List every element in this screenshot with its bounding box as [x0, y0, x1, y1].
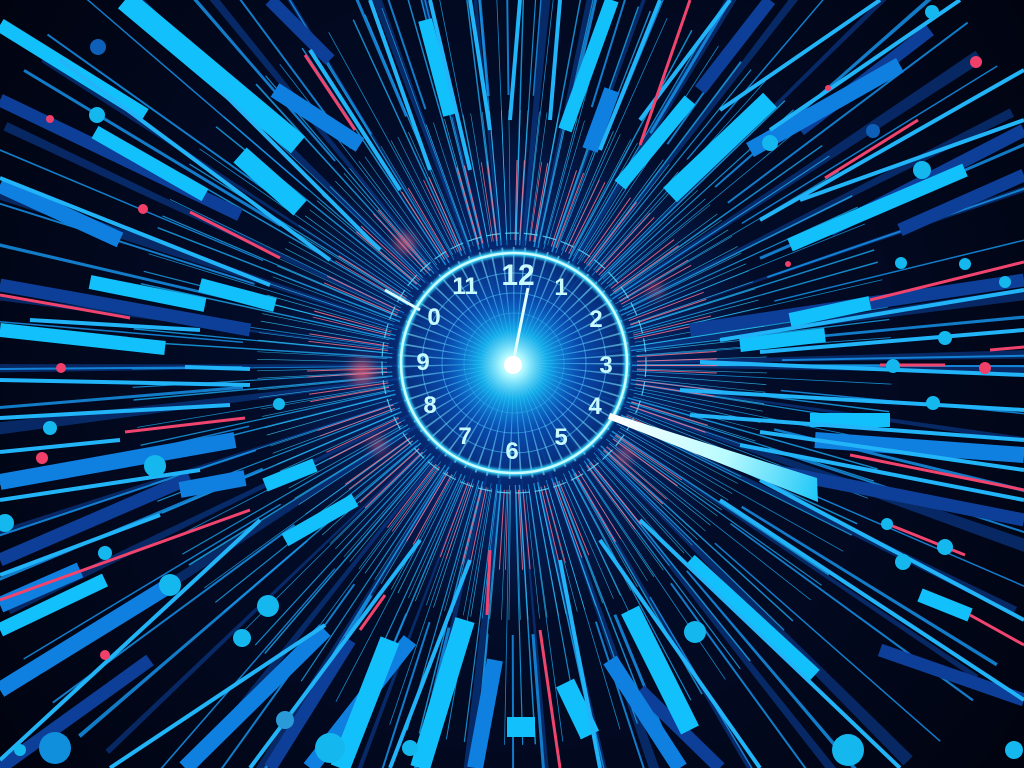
clock grid	[382, 233, 646, 493]
centre point	[504, 356, 522, 374]
clock numerals	[416, 259, 613, 465]
clock numerals: 2	[589, 306, 603, 333]
clock face ring	[401, 253, 627, 473]
clock numerals: 5	[554, 424, 568, 451]
clock numerals: 3	[599, 352, 613, 379]
minute hand	[513, 288, 528, 363]
light beam at four o'clock	[608, 413, 818, 502]
clock numerals: 12	[501, 259, 535, 292]
streak set: top left	[125, 0, 298, 145]
central glow	[398, 250, 628, 480]
short bright streak at ten o'clock	[385, 290, 420, 310]
clock numerals: 6	[505, 438, 519, 465]
clock numerals: 4	[588, 393, 602, 420]
clock numerals: 0	[427, 304, 441, 331]
clock numerals: 7	[458, 423, 472, 450]
clock numerals: 8	[423, 392, 437, 419]
streak set: large bright bars	[240, 100, 770, 768]
pink glow patches around ring	[350, 234, 661, 462]
pink dots	[36, 56, 991, 660]
clock numerals: 9	[416, 349, 430, 376]
clock numerals: 11	[452, 273, 478, 300]
clock numerals: 1	[554, 274, 568, 301]
